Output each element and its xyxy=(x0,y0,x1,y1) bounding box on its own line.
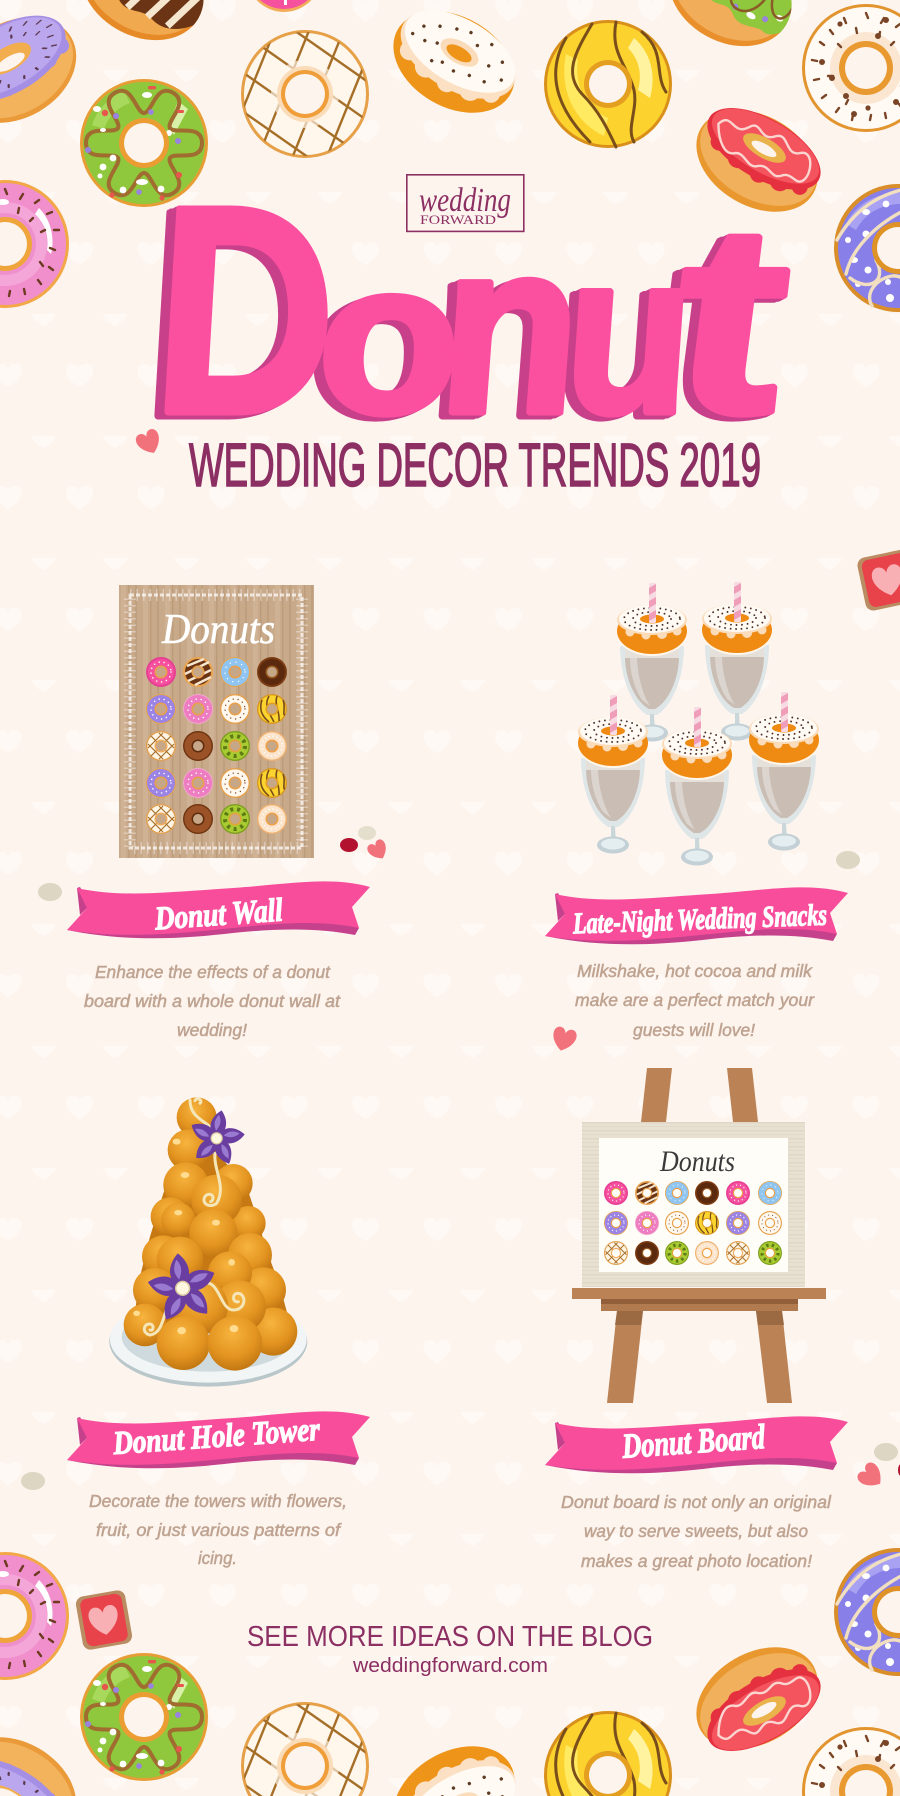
donut: purple-blue bottom xyxy=(834,1548,900,1676)
easel xyxy=(572,1068,826,1403)
donut: pink top xyxy=(246,0,322,12)
text: donut wall xyxy=(84,962,341,1040)
icon: cookie top right xyxy=(856,548,900,612)
framed board xyxy=(582,1122,805,1287)
logo: Wedding Forward: FORWARD xyxy=(420,212,496,227)
donut: yellow bottom xyxy=(544,1711,672,1796)
wood board with vine border xyxy=(119,585,314,858)
text: tower xyxy=(89,1491,347,1568)
donut: yellow xyxy=(544,20,672,148)
ribbon: donut wall: Donut Wall xyxy=(153,893,285,937)
text: board xyxy=(561,1492,832,1571)
donut: lattice xyxy=(219,10,389,175)
milkshakes xyxy=(578,582,819,866)
donut: purple left xyxy=(0,0,95,144)
text: tower: Decorate the towers with flowers, xyxy=(89,1491,347,1511)
panel: donut board xyxy=(545,1068,848,1571)
ribbon: board xyxy=(545,1416,848,1473)
top donut border xyxy=(0,0,900,312)
ribbon: donut wall xyxy=(67,881,370,938)
candies by donut wall xyxy=(38,826,391,901)
panel: donut hole tower xyxy=(67,1097,370,1568)
board lettering: Donuts xyxy=(659,1145,735,1178)
text: board: makes a great photo location! xyxy=(581,1551,812,1571)
text: snacks xyxy=(575,961,815,1040)
panel: donut wall xyxy=(67,585,370,1040)
text: snacks: make are a perfect match your xyxy=(575,990,815,1010)
ribbon: board: Donut Board xyxy=(620,1417,767,1466)
donut: pink left xyxy=(0,180,69,308)
donut grid xyxy=(146,657,287,834)
donut: red xyxy=(678,90,836,232)
donut: white drip bottom xyxy=(375,1726,533,1796)
logo: Wedding Forward xyxy=(407,175,524,231)
donut: white drip xyxy=(375,0,533,133)
title: Donut xyxy=(135,145,810,475)
text: donut wall: wedding! xyxy=(177,1020,247,1040)
title: Donut: u xyxy=(550,207,702,461)
donut: red bottom xyxy=(678,1627,836,1769)
icon: cookie bottom left xyxy=(75,1589,133,1651)
donut grid xyxy=(604,1181,782,1265)
ribbon: tower: Donut Hole Tower xyxy=(111,1412,322,1462)
title: Donut: t xyxy=(657,170,810,469)
panel: late-night snacks xyxy=(545,582,848,1040)
candy and heart decorations xyxy=(21,851,900,1493)
donut: green bottom xyxy=(65,1638,223,1796)
board lettering: Donuts xyxy=(161,607,275,653)
call to action: SEE MORE IDEAS ON THE BLOG xyxy=(247,1621,653,1653)
icon: heart near subtitle xyxy=(134,427,165,458)
text: snacks: guests will love! xyxy=(633,1020,755,1040)
text: donut wall: Enhance the effects of a donut xyxy=(95,962,331,982)
donut: green xyxy=(65,64,223,222)
ribbon: snacks xyxy=(545,887,848,944)
title: Donut: n xyxy=(425,192,592,465)
title: Donut: D xyxy=(135,145,350,475)
donut: pink left bottom xyxy=(0,1552,69,1680)
bottom donut border xyxy=(0,1548,900,1796)
text: donut wall: board with a whole donut wall at xyxy=(84,991,341,1011)
logo: Wedding Forward: wedding xyxy=(419,182,511,219)
text: tower: fruit, or just various patterns of xyxy=(96,1520,342,1540)
donut: white sprinkles bottom xyxy=(802,1727,900,1796)
text: snacks: Milkshake, hot cocoa and milk xyxy=(577,961,813,981)
call to action: weddingforward.com xyxy=(352,1655,548,1677)
donut: lattice bottom xyxy=(219,1682,389,1796)
text: board: Donut board is not only an original xyxy=(561,1492,832,1512)
text: tower: icing. xyxy=(198,1548,237,1568)
donut: purple left bottom xyxy=(0,1716,95,1796)
donut: chocolate top xyxy=(88,0,204,40)
donut: white sprinkles right xyxy=(802,4,900,132)
croquembouche xyxy=(109,1097,307,1387)
title: Donut: o xyxy=(305,218,470,458)
call to action xyxy=(247,1621,653,1677)
donut: purple-blue right xyxy=(834,184,900,312)
donut: green top xyxy=(672,0,792,46)
text: board: way to serve sweets, but also xyxy=(584,1521,808,1541)
